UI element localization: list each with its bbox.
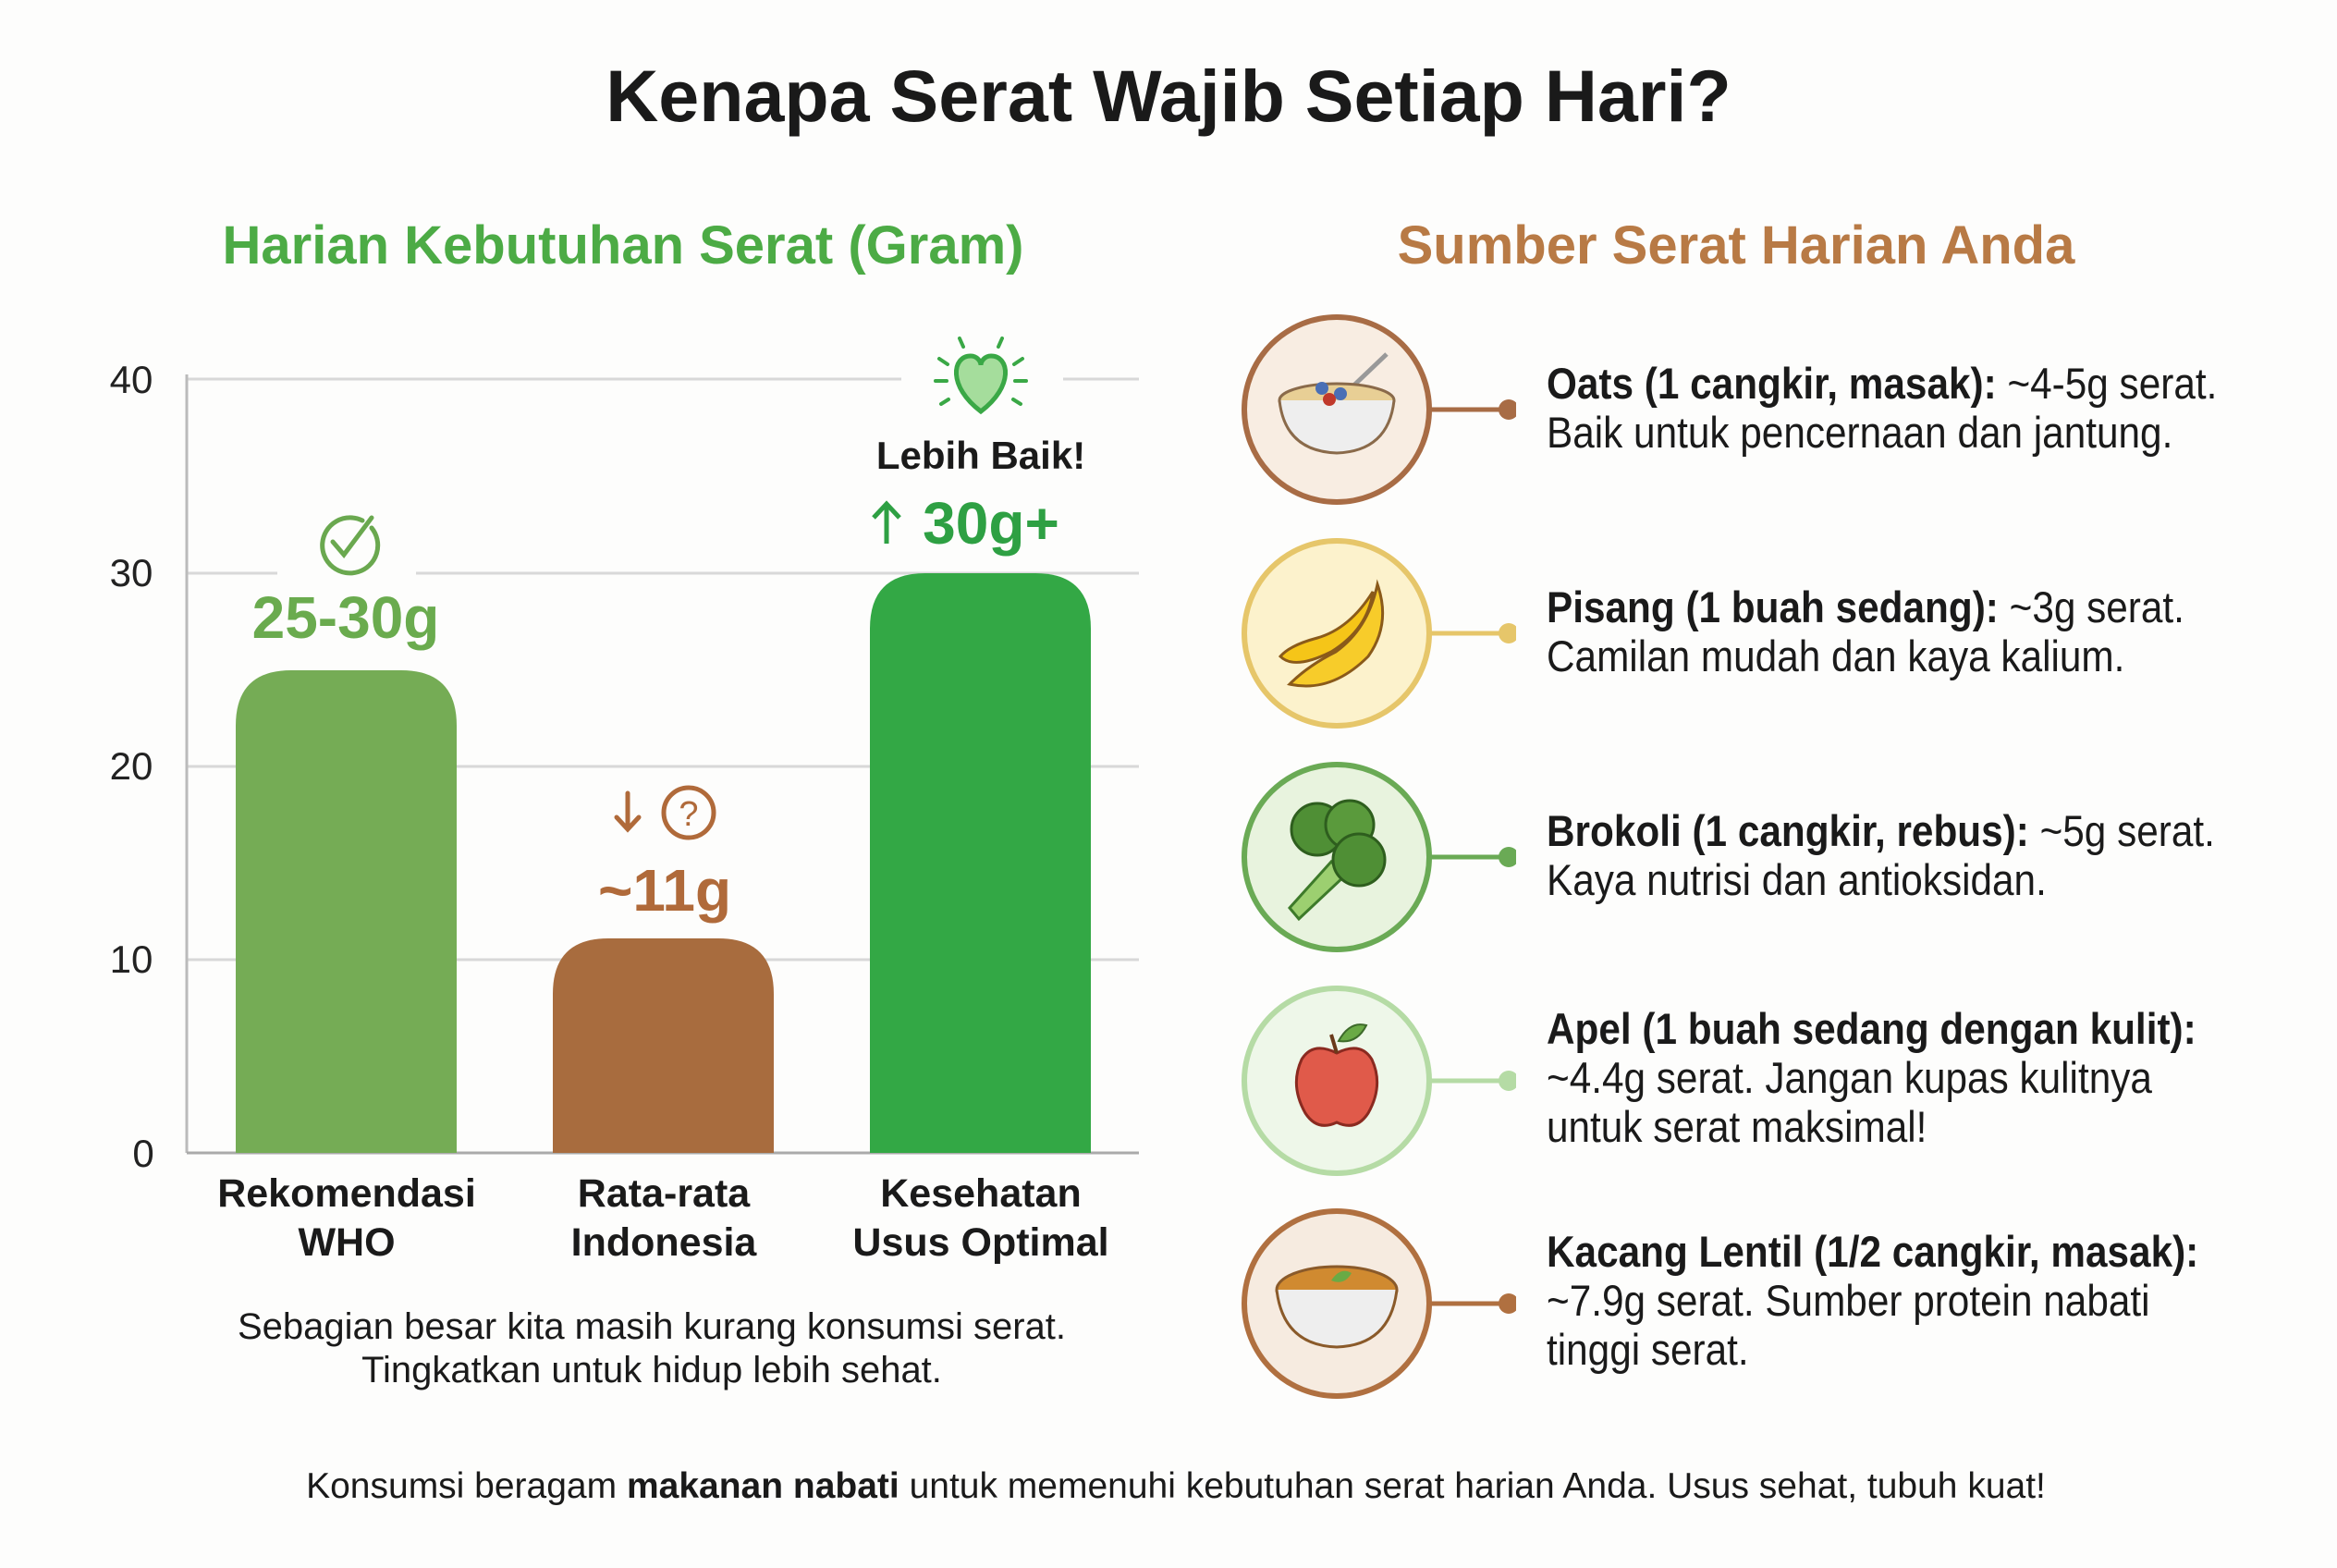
- footer: Konsumsi beragam makanan nabati untuk memenuhi kebutuhan serat harian Anda. Usus sehat, tubuh kuat!: [306, 1466, 2046, 1506]
- text: brokoli: Brokoli (1 cangkir, rebus): ~5g serat.: [1547, 806, 2215, 855]
- y axis labels: 30: [110, 551, 153, 594]
- item: oats: [1242, 314, 2217, 505]
- text: Usus Optimal: [852, 1220, 1109, 1265]
- icon: down arrow question: ?: [679, 795, 699, 834]
- bar: optimal: [870, 573, 1091, 1153]
- text: brokoli: Kaya nutrisi dan antioksidan.: [1547, 855, 2047, 904]
- category labels: WHO: [298, 1220, 396, 1265]
- y axis labels: 20: [110, 744, 153, 788]
- text: apel: Apel (1 buah sedang dengan kulit):: [1547, 1004, 2196, 1053]
- item: pisang: [1242, 538, 2184, 729]
- value: ~11g: ~11g: [598, 857, 731, 924]
- y axis labels: 40: [110, 358, 153, 401]
- bar chart: [110, 337, 1139, 1175]
- chart caption: Sebagian besar kita masih kurang konsumsi serat.: [238, 1306, 1066, 1347]
- y axis labels: [110, 358, 154, 1175]
- chart caption: Tingkatkan untuk hidup lebih sehat.: [361, 1350, 942, 1390]
- text: oats: Oats (1 cangkir, masak): ~4-5g serat.: [1547, 359, 2217, 408]
- text: lentil: ~7.9g serat. Sumber protein nabati: [1547, 1276, 2150, 1325]
- item: brokoli: [1242, 762, 2215, 952]
- icon: broccoli: [1242, 762, 1516, 952]
- label: Lebih Baik: Lebih Baik!: [876, 434, 1085, 477]
- heading: sources: Sumber Serat Harian Anda: [1398, 215, 2074, 276]
- text: apel: [1547, 1004, 2196, 1151]
- bar: WHO: [236, 670, 457, 1153]
- text: lentil: tinggi serat.: [1547, 1325, 1749, 1374]
- icon: heart: [901, 338, 1063, 411]
- category labels: [217, 1171, 476, 1265]
- bar: Indonesia: [553, 938, 774, 1153]
- text: brokoli: [1547, 806, 2215, 904]
- y axis labels: 10: [110, 937, 153, 981]
- text: oats: Baik untuk pencernaan dan jantung.: [1547, 408, 2172, 457]
- icon: lentil bowl: [1242, 1208, 1516, 1399]
- text: Kesehatan: [880, 1171, 1082, 1216]
- icon: check: [277, 518, 416, 582]
- text: lentil: [1547, 1227, 2198, 1374]
- text: apel: ~4.4g serat. Jangan kupas kulitnya: [1547, 1053, 2152, 1102]
- text: Rata-rata: [578, 1171, 750, 1216]
- text: apel: untuk serat maksimal!: [1547, 1102, 1927, 1151]
- text: pisang: Camilan mudah dan kaya kalium.: [1547, 631, 2124, 680]
- icon: down arrow question: [617, 788, 714, 838]
- text: oats: [1547, 359, 2217, 457]
- icon: banana: [1242, 538, 1516, 729]
- icon: oats bowl: [1242, 314, 1516, 505]
- chart caption: [238, 1306, 1066, 1390]
- text: pisang: [1547, 582, 2184, 680]
- text: lentil: Kacang Lentil (1/2 cangkir, masak):: [1547, 1227, 2198, 1276]
- value: 30g+: 30g+: [923, 490, 1059, 557]
- y axis labels: 0: [132, 1132, 154, 1175]
- text: Indonesia: [571, 1220, 756, 1265]
- text: pisang: Pisang (1 buah sedang): ~3g serat.: [1547, 582, 2184, 631]
- value: 25-30g: 25-30g: [252, 584, 439, 651]
- item: apel: [1242, 986, 2196, 1176]
- category labels: Rekomendasi: [217, 1171, 476, 1216]
- title: Kenapa Serat Wajib Setiap Hari?: [606, 55, 1731, 137]
- icon: apple: [1242, 986, 1516, 1176]
- heading: chart: Harian Kebutuhan Serat (Gram): [223, 215, 1023, 276]
- item: lentil: [1242, 1208, 2198, 1399]
